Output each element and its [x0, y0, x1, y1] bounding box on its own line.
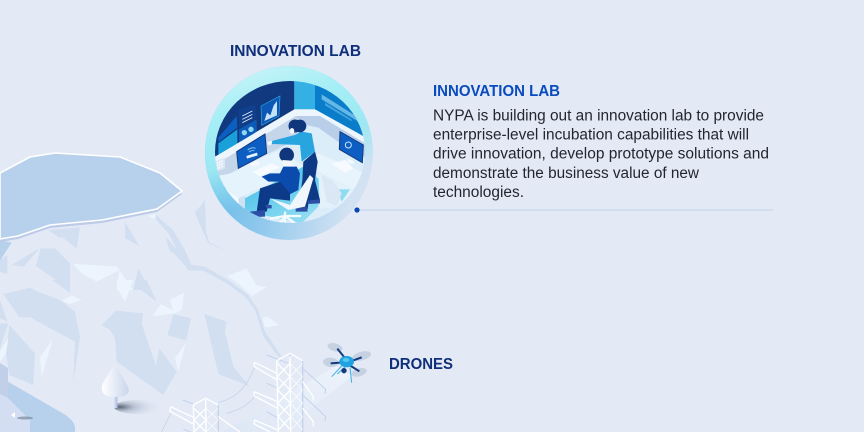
pylon: large	[254, 353, 326, 432]
tree	[102, 363, 162, 414]
gradient ring	[205, 66, 373, 240]
lower furniture and people	[213, 120, 365, 223]
body copy: enterprise-level incubation capabilities that will	[433, 126, 749, 144]
body copy	[433, 108, 769, 201]
icon: drone	[323, 341, 372, 383]
subheading: INNOVATION LAB	[433, 83, 560, 100]
terrain facets: lower area	[0, 280, 191, 399]
power lines	[162, 365, 256, 432]
circular illustration: innovation lab	[205, 66, 375, 240]
spare chair	[322, 175, 342, 207]
body copy: technologies.	[433, 184, 524, 201]
woman head detail	[288, 120, 298, 134]
monitor left	[237, 134, 280, 177]
pale rear arms	[267, 354, 326, 432]
left desk	[220, 174, 228, 186]
pylon: small	[170, 398, 240, 432]
office scene	[215, 81, 365, 223]
dark left wall	[215, 81, 294, 157]
mountain terrain	[0, 153, 282, 432]
water inlet	[0, 378, 75, 432]
label: drones: DRONES	[389, 356, 453, 373]
connector line	[354, 207, 773, 213]
wall panels	[218, 116, 237, 142]
lake	[0, 153, 182, 242]
standing woman	[267, 120, 320, 212]
terrain facets: upper area	[0, 207, 200, 290]
scene base	[215, 106, 365, 223]
body copy: NYPA is building out an innovation lab to provide	[433, 108, 764, 124]
white frame	[254, 353, 313, 432]
text block: innovation lab	[433, 83, 769, 201]
walls	[215, 81, 365, 223]
chair	[270, 175, 313, 223]
terrain facets: right area	[155, 200, 282, 386]
right desk	[316, 154, 362, 189]
centre wall	[294, 81, 315, 110]
heading: innovation lab above circle: INNOVATION LAB	[230, 43, 361, 60]
drone light beam	[222, 366, 352, 432]
floor	[245, 167, 320, 223]
partition tops	[215, 109, 364, 162]
body copy: drive innovation, develop prototype solutions and	[433, 146, 769, 162]
monitor right	[331, 132, 363, 173]
body copy: demonstrate the business value of new	[433, 165, 700, 182]
seated man	[250, 148, 300, 217]
isometric block	[0, 363, 33, 432]
keypad panel	[216, 158, 225, 171]
right wall	[315, 85, 363, 136]
